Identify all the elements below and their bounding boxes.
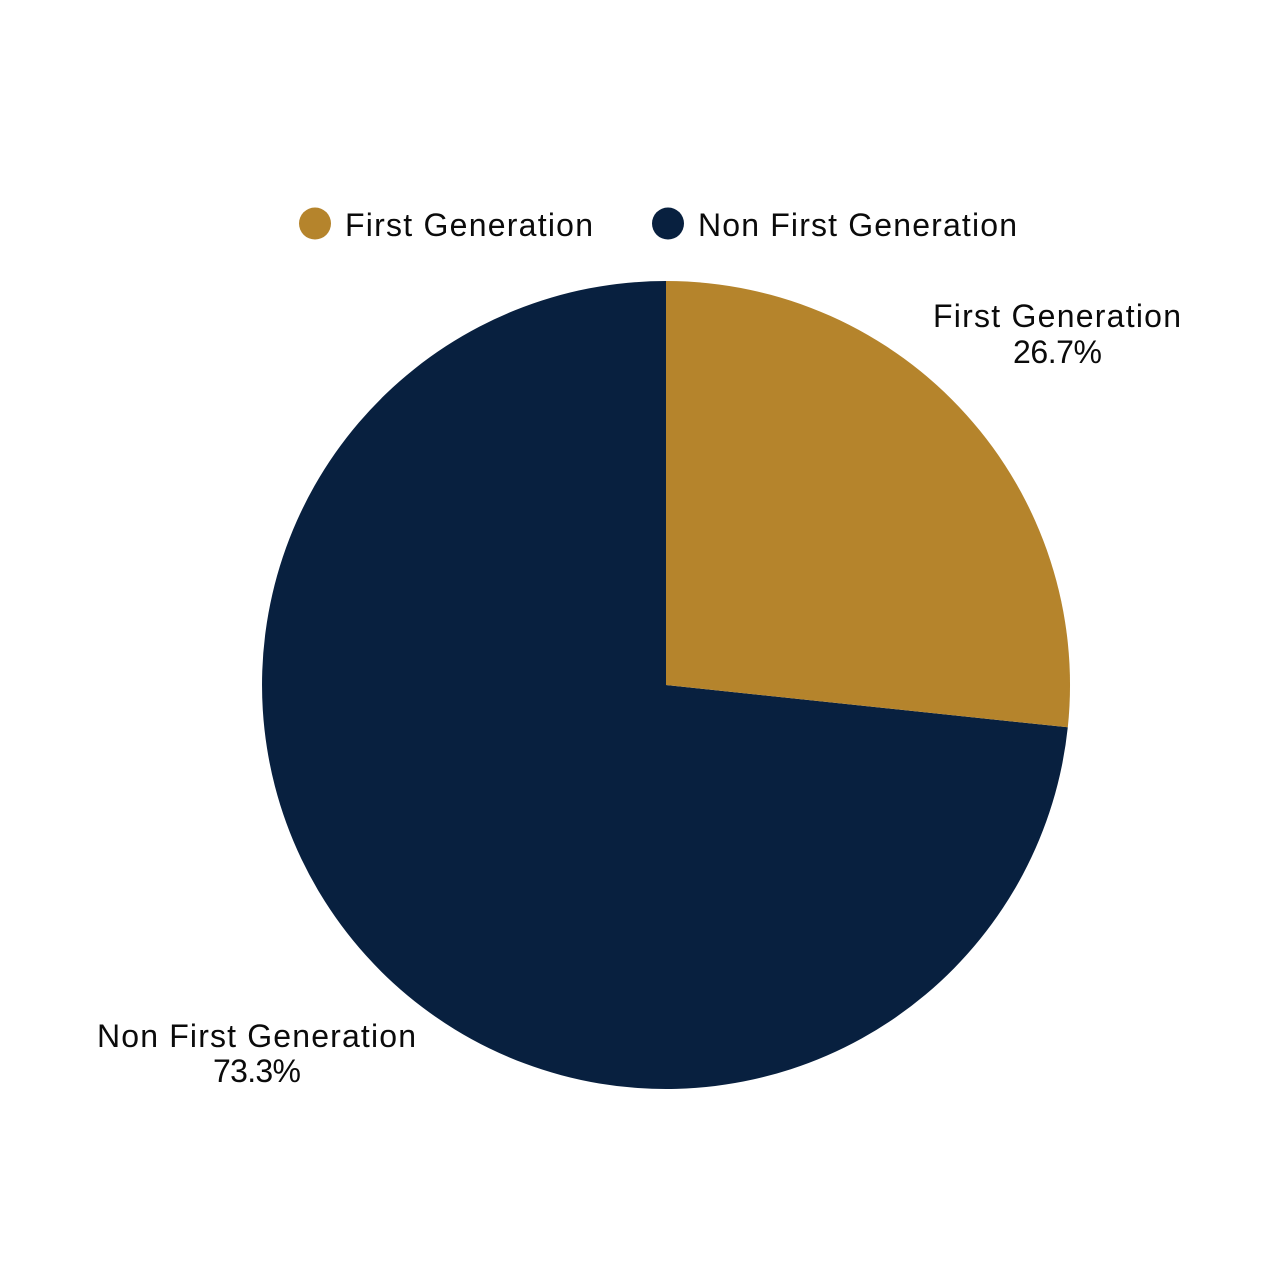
data label: non first generation: 73.3% [213,1053,301,1089]
data label: non first generation: Non First Generation [97,1018,416,1054]
data label: non first generation [97,1018,416,1089]
pie slice: non first generation 73.3% [262,281,1068,1089]
legend label: non first generation: Non First Generation [698,207,1017,243]
legend [299,207,1017,243]
data label: first generation: 26.7% [1013,334,1102,370]
data label: first generation: First Generation [933,298,1181,334]
legend marker: non first generation [652,208,684,240]
legend marker: first generation [299,208,331,240]
data label: first generation [933,298,1181,370]
pie slice: first generation 26.7% [666,281,1070,727]
legend label: first generation: First Generation [345,207,593,243]
